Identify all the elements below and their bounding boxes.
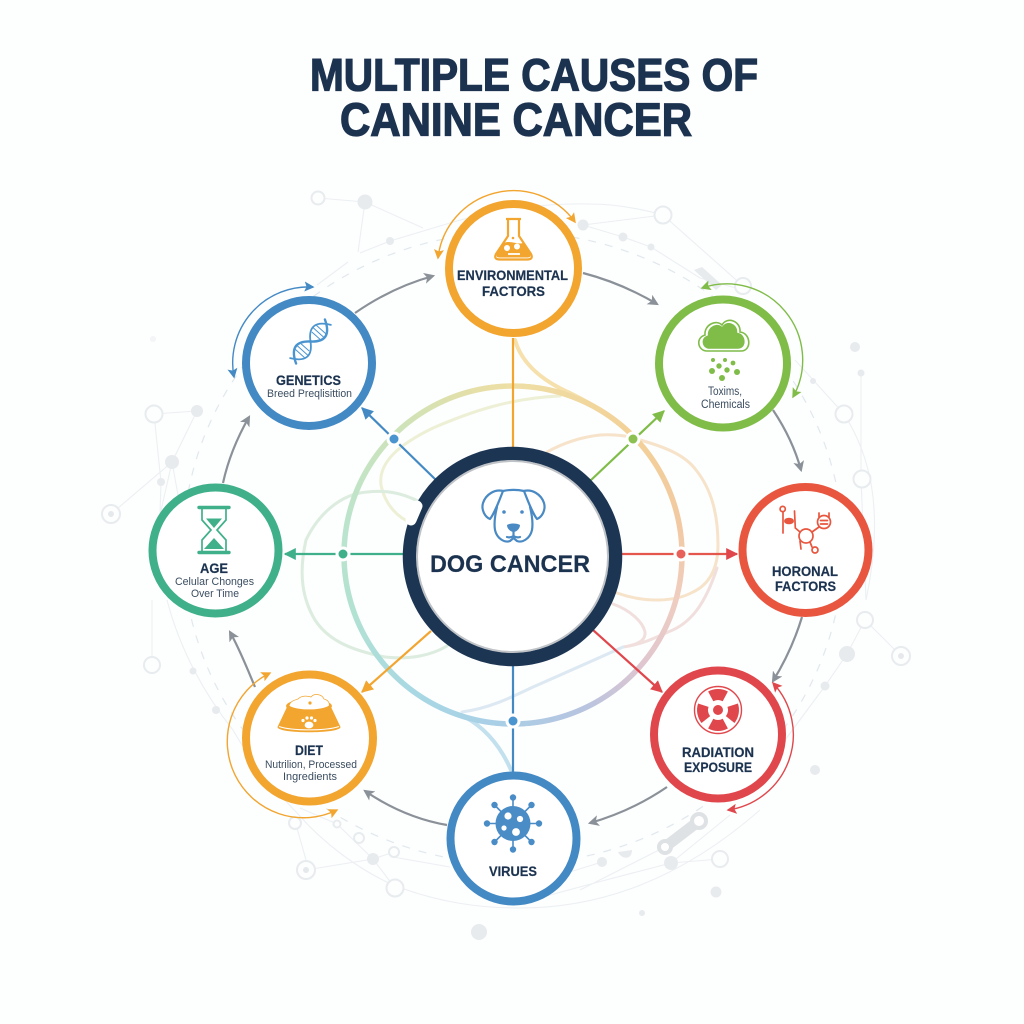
spoke arrows from center to causes (285, 338, 737, 773)
panel: viruses: VIRUES (489, 864, 537, 879)
panel: hormonal factors: HORONAL (772, 564, 838, 579)
panel: toxins and chemicals: Chemicals (701, 399, 750, 411)
icon: food bowl (277, 695, 341, 732)
panel: environmental factors (438, 191, 578, 333)
icon: dog head (482, 490, 545, 542)
panel: radiation exposure: EXPOSURE (684, 760, 752, 775)
icon: dna helix (287, 317, 334, 366)
panel: viruses (450, 776, 576, 902)
center hub: dog cancer: DOG CANCER (430, 551, 590, 578)
panel: diet (227, 673, 373, 818)
panel: diet: Ingredients (283, 771, 337, 783)
grey cycle arrows between causes (223, 273, 802, 825)
panel: hormonal factors: FACTORS (775, 579, 836, 594)
panel: radiation exposure (654, 670, 793, 810)
panel: environmental factors: FACTORS (482, 284, 545, 299)
large central gradient ring (341, 383, 685, 727)
icon: hormone molecule (780, 506, 830, 553)
panel: toxins and chemicals: Toxims, (708, 386, 742, 398)
title (310, 50, 758, 146)
icon: virus (484, 794, 542, 853)
center hub: dog cancer (410, 454, 616, 660)
panel: diet: Nutrilion, Processed (265, 759, 357, 771)
panel: toxins and chemicals (659, 284, 803, 428)
panel: age (152, 488, 278, 614)
panel: hormonal factors (742, 487, 868, 613)
panel: age: Over Time (191, 588, 239, 600)
icon: cloud with particles (699, 320, 749, 381)
title: MULTIPLE CAUSES OF (310, 50, 758, 100)
spoke junction dots (337, 433, 687, 727)
icon: radiation symbol (694, 686, 742, 734)
panel: age: AGE (200, 561, 228, 576)
panel: genetics: Breed Preqlisittion (267, 388, 352, 400)
panel: age: Celular Chonges (175, 576, 254, 588)
panel: environmental factors: ENVIRONMENTAL (457, 268, 568, 283)
icon: hourglass (199, 508, 229, 552)
panel: radiation exposure: RADIATION (682, 745, 754, 760)
panel: diet: DIET (295, 743, 324, 758)
title: CANINE CANCER (340, 94, 692, 146)
panel: genetics: GENETICS (276, 373, 341, 388)
icon: flask (495, 219, 532, 260)
panel: genetics (233, 287, 372, 426)
